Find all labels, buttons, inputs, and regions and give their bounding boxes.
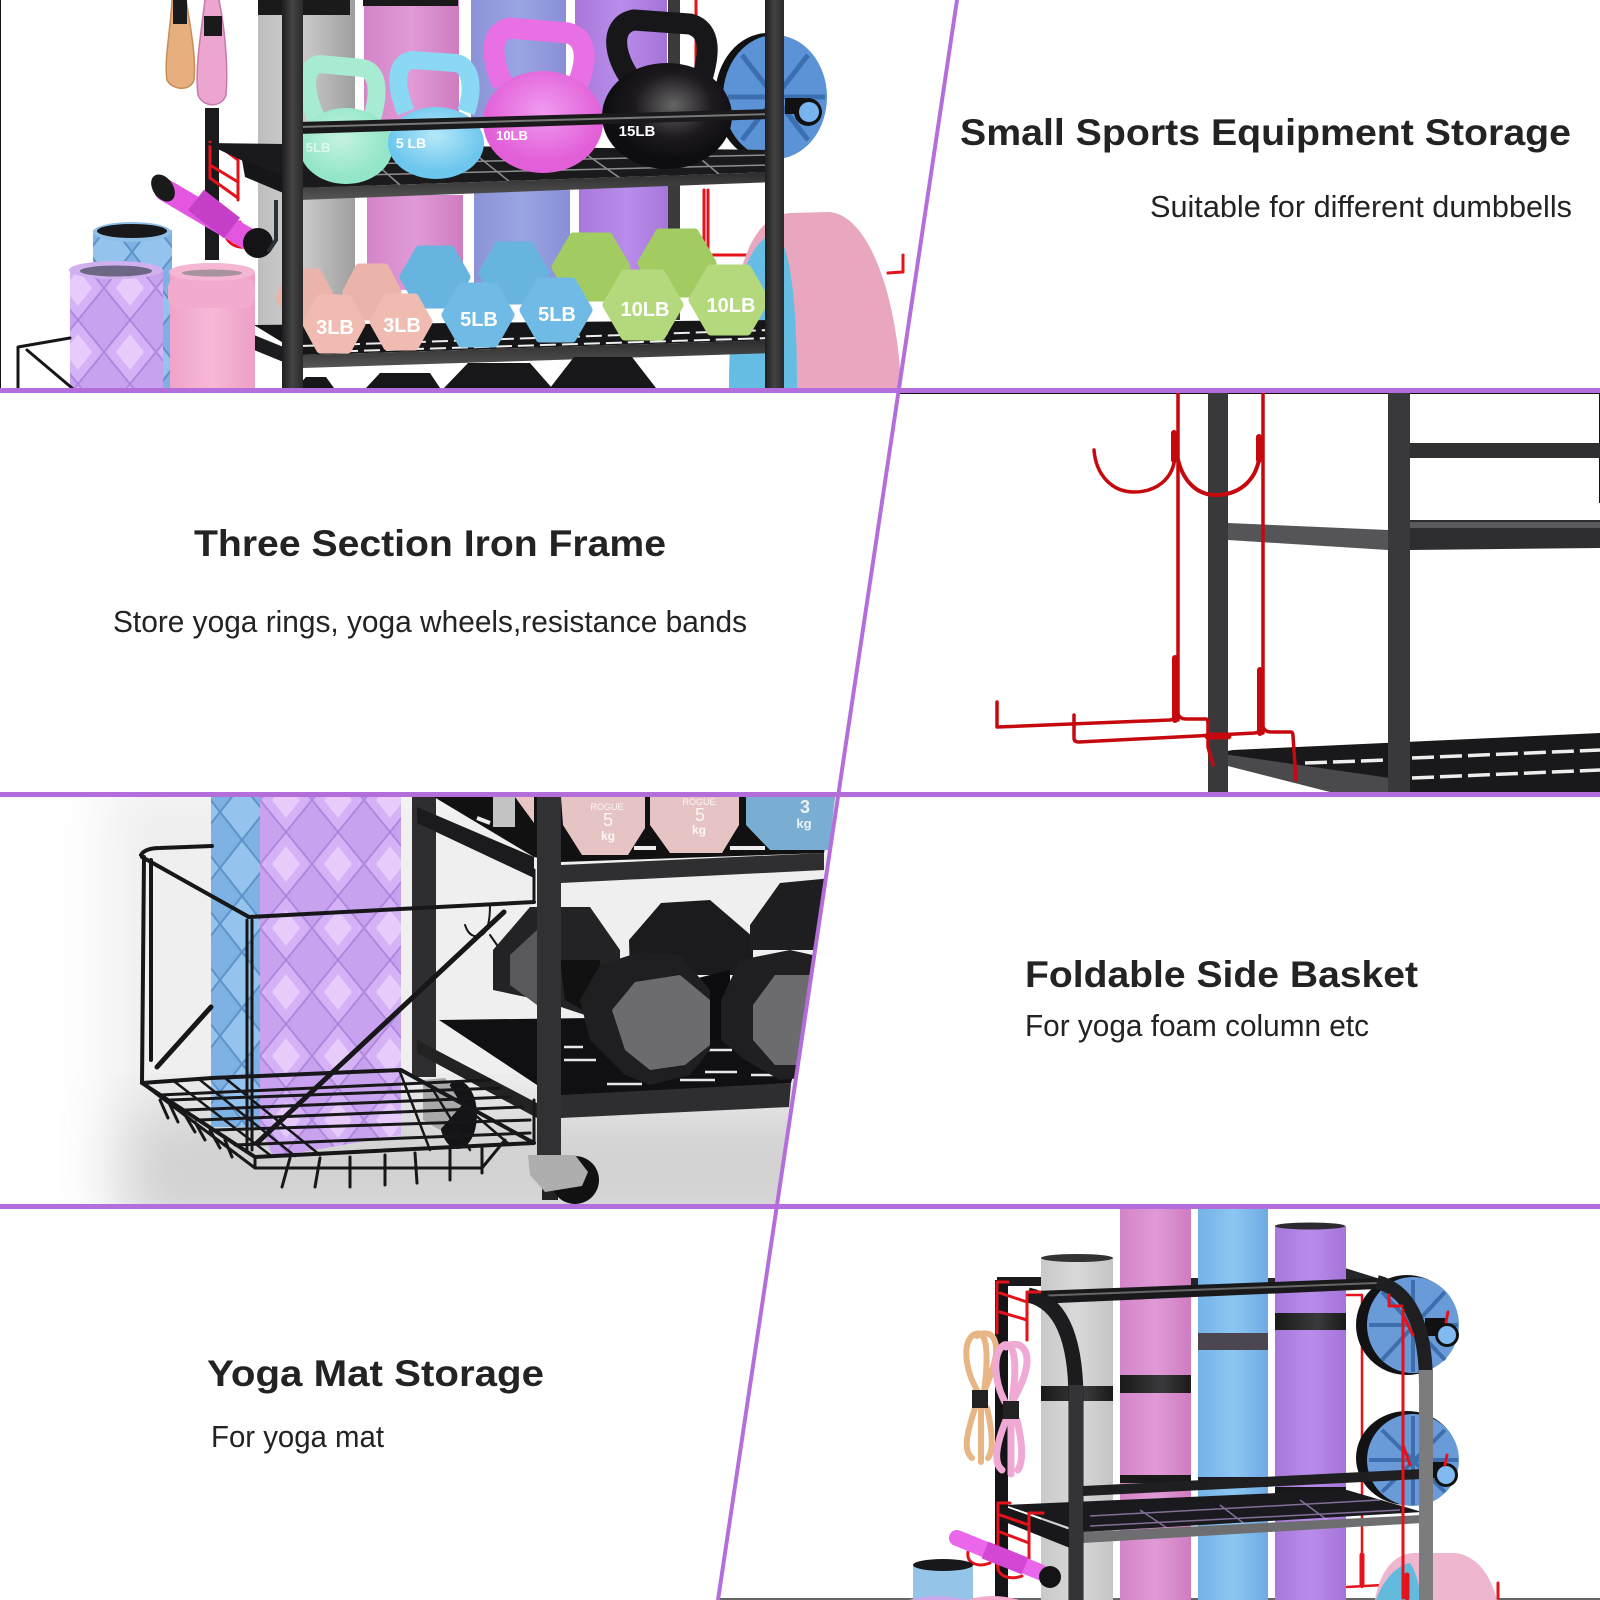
back rail bbox=[995, 1268, 1390, 1600]
small dumbbells row: 5LB bbox=[538, 304, 576, 326]
black dumbbells below bbox=[296, 357, 656, 388]
kg dumbbells on shelf: 5 bbox=[603, 810, 613, 830]
ab wheels bbox=[1356, 1275, 1459, 1506]
frame posts bbox=[1208, 393, 1410, 792]
floor shadow backdrop bbox=[92, 797, 836, 1204]
small dumbbells row: 10LB bbox=[621, 299, 669, 321]
kettlebells: 15LB bbox=[619, 123, 656, 140]
text: for yoga mat: For yoga mat bbox=[211, 1419, 384, 1454]
front post and caster bbox=[528, 797, 599, 1204]
kg dumbbells on shelf: ROGUE bbox=[590, 802, 624, 812]
shelf bbox=[1000, 1490, 1422, 1548]
heading: yoga mat storage: Yoga Mat Storage bbox=[207, 1353, 544, 1394]
kg dumbbells on shelf: ROGUE bbox=[682, 797, 716, 807]
rolled yoga mats bbox=[1041, 1209, 1346, 1600]
panel: yoga mat storage closeup bbox=[718, 1209, 1600, 1600]
kettlebells bbox=[299, 20, 732, 184]
kg dumbbells on shelf: 3 bbox=[800, 797, 810, 817]
heading: three section iron frame: Three Section Iron Frame bbox=[194, 523, 666, 564]
left red ladders bbox=[997, 1282, 1043, 1570]
text: for yoga foam column: For yoga foam column etc bbox=[1025, 1008, 1369, 1043]
red side hooks bbox=[210, 0, 903, 273]
top front rail bbox=[1035, 1278, 1377, 1304]
text: suitable for different dumbbells: Suitable for different dumbbells bbox=[1150, 189, 1572, 224]
heading: foldable side basket: Foldable Side Basket bbox=[1025, 954, 1418, 995]
small dumbbells row bbox=[280, 233, 765, 349]
panel: foldable side basket closeup bbox=[92, 797, 836, 1204]
black hex dumbbells bbox=[493, 878, 835, 1085]
lower shelf bbox=[417, 1015, 810, 1118]
kg dumbbells on shelf bbox=[561, 797, 835, 855]
kettlebells: 5LB bbox=[306, 140, 330, 155]
small dumbbells row: 5LB bbox=[460, 309, 498, 331]
back caster bbox=[423, 1078, 477, 1149]
small dumbbells row: 10LB bbox=[707, 295, 755, 317]
heading: small sports equipment storage: Small Sports Equipment Storage bbox=[960, 112, 1571, 153]
massage roller bbox=[146, 170, 276, 258]
panel: rack closeup with kettlebells and dumbbells bbox=[0, 0, 903, 388]
kg dumbbells on shelf: kg bbox=[601, 829, 615, 843]
kg dumbbells on shelf: 5 bbox=[695, 805, 705, 825]
panel: iron frame closeup bbox=[898, 393, 1600, 792]
massage roller bbox=[957, 1538, 1061, 1588]
yoga mats bbox=[258, 0, 674, 325]
wire basket bbox=[141, 846, 534, 1187]
small dumbbells row: 3LB bbox=[383, 315, 421, 337]
red vertical hook bbox=[1389, 1295, 1448, 1598]
curved front uprights bbox=[1028, 1282, 1426, 1600]
bottom shelf bbox=[254, 320, 775, 370]
kg dumbbells on shelf: kg bbox=[692, 823, 706, 837]
small dumbbells row: 3LB bbox=[316, 317, 354, 339]
top shelf bbox=[205, 143, 775, 200]
kettlebells: 10LB bbox=[496, 128, 528, 143]
back post and upper shelf bbox=[412, 797, 835, 1077]
resistance bands bbox=[966, 1333, 1027, 1474]
front bar bbox=[298, 109, 771, 134]
resistance bands bbox=[166, 0, 227, 105]
front posts bbox=[282, 0, 784, 388]
kg dumbbells on shelf: kg bbox=[796, 816, 812, 831]
yoga wheel bbox=[1375, 1553, 1498, 1600]
ab wheel bbox=[715, 33, 827, 161]
foam rollers in basket bbox=[211, 797, 401, 1157]
red hook frame bbox=[997, 393, 1296, 780]
back frame posts bbox=[205, 0, 680, 320]
foam rollers peeking bbox=[909, 1559, 1019, 1600]
basket corner bbox=[18, 338, 72, 388]
mid bar bbox=[1083, 1469, 1422, 1496]
text: store yoga rings: Store yoga rings, yoga wheels,resistance bands bbox=[113, 604, 747, 639]
bottom shelf bbox=[1216, 733, 1600, 792]
yoga wheel bbox=[729, 212, 901, 388]
kettlebells: 5 LB bbox=[396, 135, 426, 151]
foam rollers bbox=[69, 222, 255, 388]
upper rails bbox=[1228, 443, 1600, 550]
red right hooks bbox=[1346, 1294, 1379, 1588]
